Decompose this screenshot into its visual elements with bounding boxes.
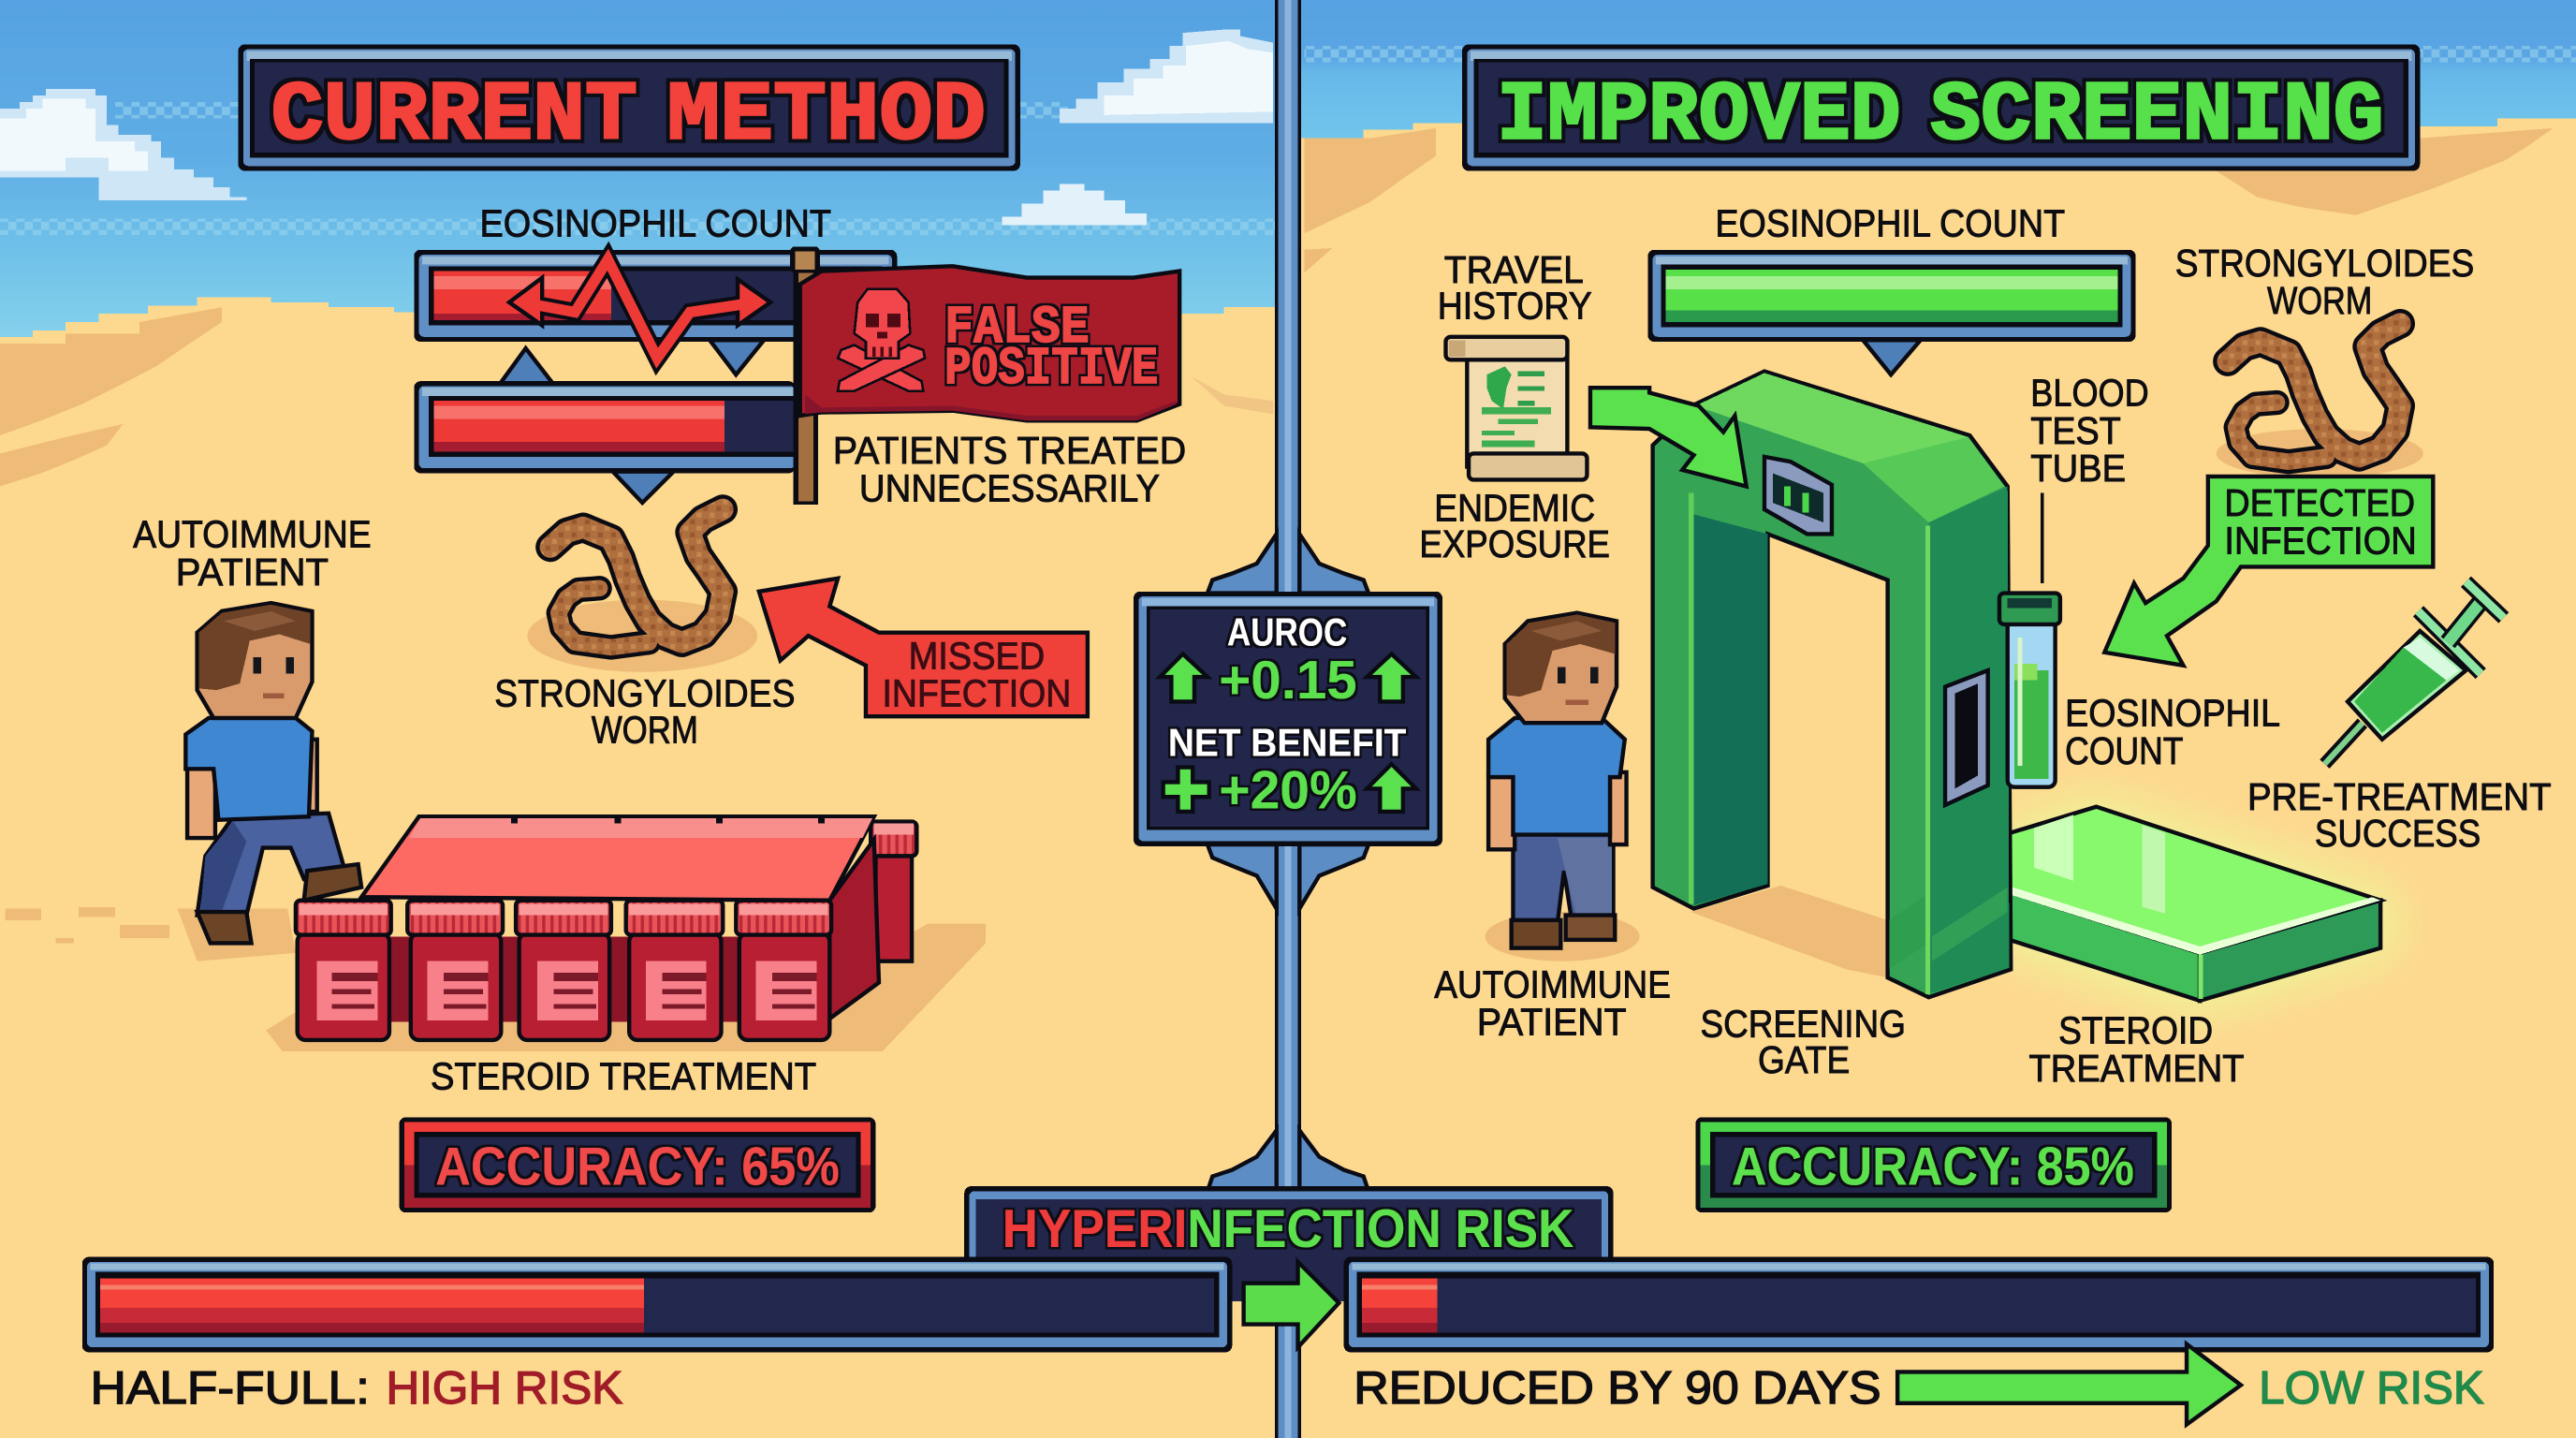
label: eosinophil count: EOSINOPHIL COUNT (479, 202, 831, 245)
badge: accuracy 65 percent: ACCURACY: 65% (435, 1137, 840, 1196)
metric: net benefit (1164, 720, 1416, 820)
label: eosinophil count: EOSINOPHIL COUNT (1715, 202, 2065, 245)
gauge: eosinophil count lower (414, 348, 795, 503)
callout: missed infection: MISSED (909, 634, 1045, 677)
icon: skull and crossbones (838, 289, 925, 391)
gauge: eosinophil count upper (414, 250, 897, 374)
metric: auroc: AUROC (1227, 610, 1347, 654)
label: screening gate: GATE (1758, 1038, 1850, 1081)
label: strongyloides worm: STRONGYLOIDES (2175, 242, 2474, 285)
title: improved screening: IMPROVED (1497, 67, 1901, 163)
badge: accuracy 85 percent (1695, 1117, 2172, 1212)
divider: centre pillar (1275, 0, 1301, 1438)
badge: accuracy 85 percent: ACCURACY: 85% (1732, 1137, 2134, 1196)
label: strongyloides worm (494, 672, 795, 751)
icon: gate side slot (1945, 670, 1988, 805)
label: endemic exposure: EXPOSURE (1419, 522, 1610, 565)
icon: gate display screen (1764, 457, 1832, 534)
icon: strongyloides worm (2217, 324, 2423, 478)
icon: travel history scroll (1445, 337, 1587, 479)
title: current method (238, 44, 1020, 171)
back bottle (871, 822, 916, 961)
label: autoimmune patient (133, 512, 372, 594)
metric: auroc: +0.15 (1219, 651, 1357, 711)
label: pre-treatment success: PRE-TREATMENT (2247, 775, 2552, 818)
arrow: towards low risk (1897, 1344, 2241, 1425)
label: eosinophil count (2065, 692, 2280, 772)
badge: accuracy 65 percent (399, 1117, 875, 1212)
callout: missed infection (759, 579, 1088, 716)
arrow: risk reduction between bars (1244, 1262, 1339, 1347)
row of bottles (296, 901, 831, 1040)
label: autoimmune patient: PATIENT (1477, 1001, 1627, 1044)
label: pre-treatment success: SUCCESS (2315, 812, 2481, 855)
panel: hyperinfection risk (964, 1186, 1614, 1301)
label: blood test tube: TEST (2030, 409, 2121, 452)
label: strongyloides worm: WORM (2267, 279, 2372, 322)
metric: net benefit: NET BENEFIT (1168, 720, 1407, 764)
icon: strongyloides worm (527, 509, 757, 672)
label: steroid treatment: STEROID (2058, 1008, 2213, 1051)
label: travel history: HISTORY (1438, 284, 1592, 327)
title: improved screening: SCREENING (1930, 67, 2384, 163)
caption: half-full high risk (91, 1363, 622, 1414)
title: improved screening (1462, 44, 2420, 171)
ornaments: pillar brackets (1208, 534, 1368, 1191)
heading: hyperinfection risk: HYPERINFECTION RISK (1003, 1199, 1574, 1259)
label: endemic exposure (1419, 486, 1610, 565)
label: travel history (1438, 248, 1592, 327)
title: current method: METHOD (667, 67, 986, 163)
label: blood test tube (2030, 371, 2149, 583)
label: steroid treatment (2029, 1008, 2244, 1090)
icon: green steroid treatment slab (1996, 792, 2398, 1019)
panel: improved screening (1419, 44, 2552, 1212)
icon: syringe (2324, 581, 2504, 764)
label: autoimmune patient: AUTOIMMUNE (1434, 962, 1671, 1005)
arrow: travel history into gate (1590, 388, 1747, 486)
icon: false positive flag: POSITIVE (944, 339, 1158, 399)
label: strongyloides worm: STRONGYLOIDES (494, 672, 795, 715)
clouds (0, 30, 1273, 225)
caption: half-full high risk: HIGH RISK (386, 1363, 622, 1414)
icon: false positive flag: FALSE (944, 298, 1090, 358)
gauge: eosinophil count full (1647, 250, 2136, 374)
metric: auroc (1160, 610, 1416, 711)
label: endemic exposure: ENDEMIC (1434, 486, 1595, 529)
label: screening gate (1701, 1002, 1906, 1081)
icon: autoimmune patient standing (1486, 613, 1640, 961)
callout: detected infection (2104, 477, 2433, 666)
label: autoimmune patient: PATIENT (176, 550, 329, 594)
label: patients treated unnecessarily: PATIENTS TREATED (833, 429, 1186, 472)
label: patients treated unnecessarily: UNNECESSARILY (859, 466, 1160, 509)
label: steroid treatment: STEROID TREATMENT (431, 1055, 816, 1098)
callout: detected infection: INFECTION (2224, 519, 2417, 562)
label: blood test tube: TUBE (2030, 447, 2126, 490)
label: autoimmune patient: AUTOIMMUNE (133, 512, 372, 555)
gauge: current risk bar (82, 1257, 1232, 1352)
icon: blood test tube (1999, 594, 2060, 787)
icon: fluctuating signal arrow (509, 259, 770, 359)
panel: current method (133, 44, 1186, 1212)
label: strongyloides worm: WORM (592, 708, 698, 751)
label: eosinophil count: COUNT (2065, 729, 2184, 772)
label: travel history: TRAVEL (1444, 248, 1584, 291)
icon: steroid treatment bottles (266, 814, 986, 1051)
gauge: improved risk bar (1344, 1257, 2494, 1352)
label: screening gate: SCREENING (1701, 1002, 1906, 1045)
icon: screening gate (1653, 372, 2011, 997)
icon: false positive flag (790, 246, 1179, 505)
metric: net benefit: +20% (1219, 760, 1357, 820)
label: eosinophil count: EOSINOPHIL (2065, 692, 2280, 735)
label: steroid treatment: TREATMENT (2029, 1047, 2244, 1090)
label: strongyloides worm (2175, 242, 2474, 322)
icon: autoimmune patient walking (178, 603, 361, 961)
caption: low risk: LOW RISK (2259, 1363, 2484, 1414)
panel: improvement metrics (1134, 592, 1442, 846)
caption: reduced by 90 days: REDUCED BY 90 DAYS (1354, 1363, 1881, 1414)
label: blood test tube: BLOOD (2030, 371, 2149, 414)
title: current method: CURRENT (271, 67, 637, 163)
caption: half-full high risk: HALF-FULL: (91, 1363, 370, 1414)
callout: detected infection: DETECTED (2224, 481, 2415, 524)
label: autoimmune patient (1434, 962, 1671, 1044)
label: pre-treatment success (2247, 775, 2552, 855)
callout: missed infection: INFECTION (882, 672, 1071, 715)
label: patients treated unnecessarily (833, 429, 1186, 509)
